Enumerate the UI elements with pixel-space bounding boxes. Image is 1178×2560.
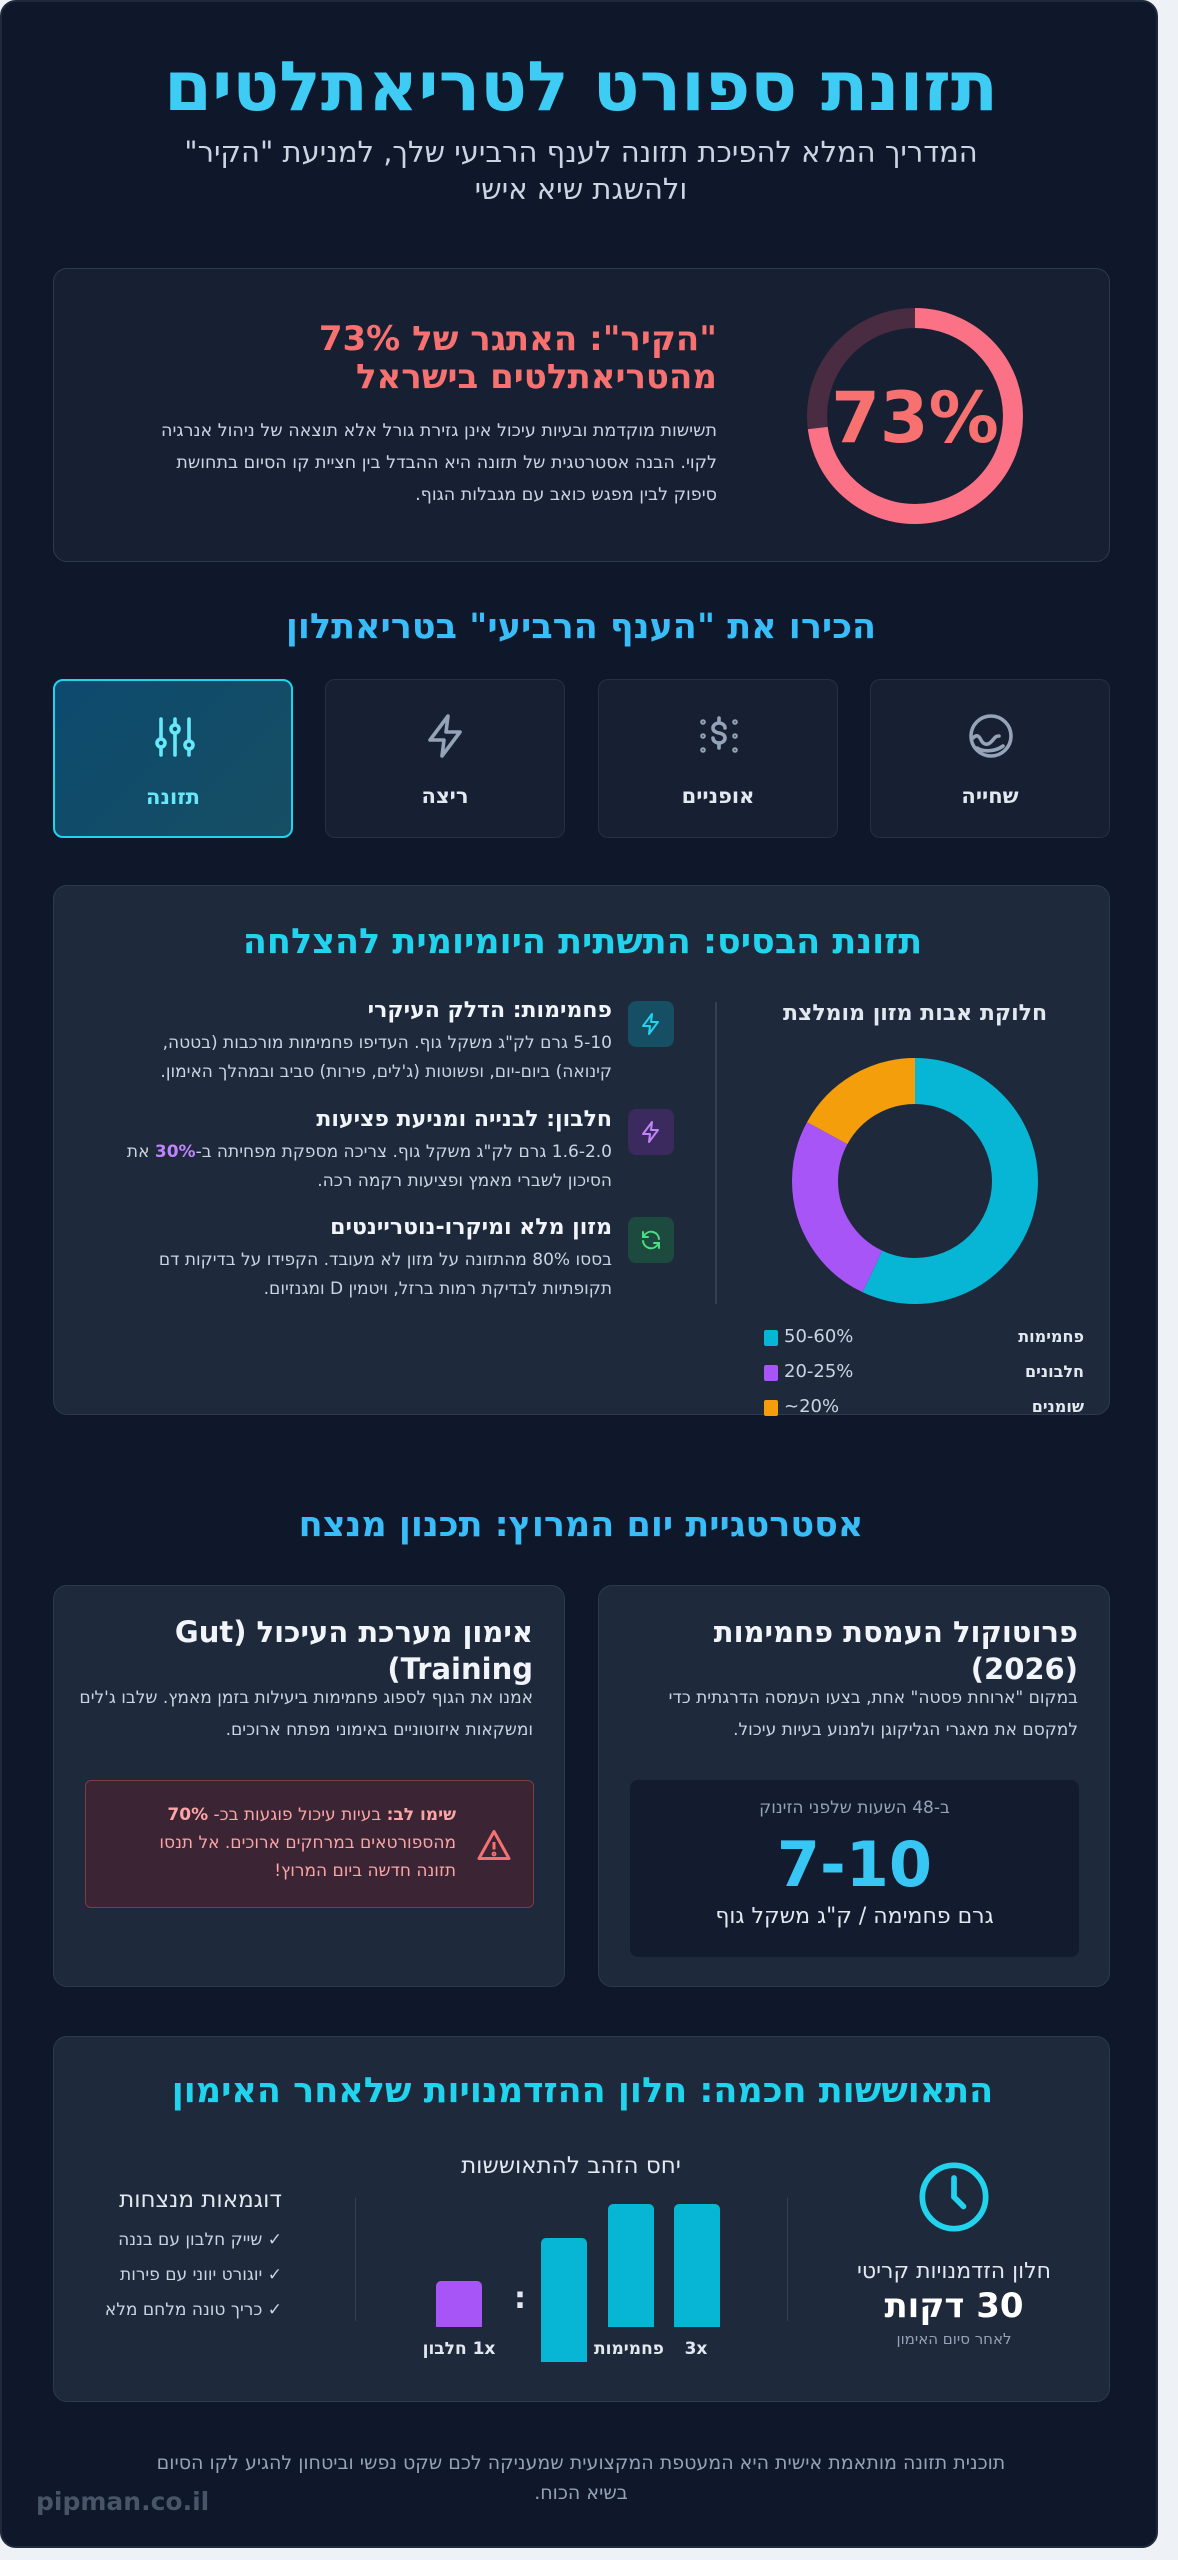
icon: bolt xyxy=(428,714,462,758)
ratio title: יחס הזהב להתאוששות xyxy=(461,2153,681,2179)
window stat: 30 דקות xyxy=(884,2286,1024,2326)
window stat: לאחר סיום האימון xyxy=(896,2330,1012,2348)
heading: race day: אסטרטגיית יום המרוץ: תכנון מנצח xyxy=(299,1505,863,1545)
panel: base nutrition xyxy=(53,885,1110,1415)
panel: gut training xyxy=(53,1585,565,1987)
donut title: חלוקת אבות מזון מומלצת xyxy=(783,1001,1047,1026)
legend: שומנים xyxy=(1032,1397,1084,1416)
ring chart 73%: 73% xyxy=(831,377,999,459)
examples list: ✓ כריך טונה מלחם מלא xyxy=(105,2300,282,2320)
tile: running: ריצה xyxy=(422,784,468,808)
legend: 20-25% xyxy=(784,1361,853,1382)
alert callout xyxy=(85,1780,534,1908)
panel: recovery xyxy=(53,2036,1110,2402)
item: whole food xyxy=(159,1215,612,1299)
tile: swimming xyxy=(870,679,1110,838)
stat heading: מהטריאתלטים בישראל xyxy=(356,357,717,397)
tile: nutrition (active): תזונה xyxy=(146,785,200,809)
item: protein: 1.6-2.0 גרם לק"ג משקל גוף. צריכה מספקת מפחיתה ב-30% את הסיכון לשברי מאמץ ופציעות רקמה רכה. xyxy=(127,1142,612,1191)
examples list: דוגמאות מנצחות xyxy=(119,2187,282,2213)
heading: פרוטוקול העמסת פחמימות (2026) xyxy=(714,1615,1078,1686)
bar chart: ratio: 3x xyxy=(685,2339,707,2359)
item: protein: חלבון: לבנייה ומניעת פציעות xyxy=(316,1107,612,1132)
legend: 50-60% xyxy=(784,1326,853,1347)
icon: protein bolt xyxy=(628,1109,674,1155)
bar chart: ratio: פחמימות xyxy=(594,2339,664,2359)
title: תזונת ספורט לטריאתלטים xyxy=(164,47,998,127)
ring chart 73% xyxy=(807,308,1023,524)
body: במקום "ארוחת פסטה" אחת, בצעו העמסה הדרגתית כדי למקסם את מאגרי הגליקוגן ולמנוע בעיות עיכול. xyxy=(669,1688,1078,1740)
window stat xyxy=(857,2259,1051,2348)
item: carbs xyxy=(160,998,612,1082)
tile: nutrition (active) xyxy=(53,679,293,838)
body: אמנו את הגוף לספוג פחמימות ביעילות בזמן מאמץ. שלבו ג'לים ומשקאות איזוטוניים באימוני מפתח ארוכים. xyxy=(79,1688,533,1740)
tile: cycling: אופניים xyxy=(682,784,754,808)
tile: cycling xyxy=(598,679,838,838)
panel: the wall stat xyxy=(53,268,1110,562)
legend xyxy=(764,1326,1084,1417)
examples list: ✓ שייק חלבון עם בננה xyxy=(118,2230,282,2250)
stat heading xyxy=(319,319,717,397)
item: protein xyxy=(127,1107,612,1191)
item: carbs: פחמימות: הדלק העיקרי xyxy=(368,998,612,1023)
icon: carbs bolt xyxy=(628,1001,674,1047)
heading: fourth branch: הכירו את "הענף הרביעי" בטריאתלון xyxy=(286,607,876,647)
icon: clock xyxy=(920,2162,988,2232)
icon: refresh xyxy=(628,1217,674,1263)
stat box: 7-10 xyxy=(777,1828,932,1901)
icon: sliders xyxy=(155,717,195,757)
item: carbs: 5-10 גרם לק"ג משקל גוף. העדיפו פחמימות מורכבות (בטטה, קינואה) ביום-יום, ופשוטות (ג'לים, פירות) סביב ובמהלך האימון. xyxy=(160,1033,612,1082)
heading: אימון מערכת העיכול (Gut Training) xyxy=(175,1615,533,1686)
heading: תזונת הבסיס: התשתית היומיומית להצלחה xyxy=(243,922,922,962)
icon: swim face xyxy=(969,714,1013,758)
examples list: ✓ יוגורט יווני עם פירות xyxy=(120,2265,282,2285)
donut chart xyxy=(792,1058,1038,1304)
panel: carb loading xyxy=(598,1585,1110,1987)
brand: pipman.co.il xyxy=(36,2487,209,2516)
alert callout: שימו לב: בעיות עיכול פוגעות בכ- 70% מהספורטאים במרחקים ארוכים. אל תנסו תזונה חדשה ביום המרוץ! xyxy=(159,1805,456,1881)
heading: התאוששות חכמה: חלון ההזדמנויות שלאחר האימון xyxy=(172,2071,993,2111)
legend: פחמימות xyxy=(1018,1327,1084,1346)
item: whole food: בססו 80% מהתזונה על מזון לא מעובד. הקפידו על בדיקות דם תקופתיות לבדיקת רמות ברזל, ויטמין D ומגנזיום. xyxy=(159,1250,612,1299)
bar chart: ratio: : xyxy=(514,2281,526,2316)
tile: swimming: שחייה xyxy=(961,784,1019,808)
icon: dollar xyxy=(700,716,738,753)
bar chart: ratio xyxy=(423,2204,720,2362)
stat box: ב-48 השעות שלפני הזינוק xyxy=(759,1798,950,1818)
window stat: חלון הזדמנויות קריטי xyxy=(857,2259,1051,2284)
examples list xyxy=(105,2187,282,2320)
stat body: תשישות מוקדמת ובעיות עיכול אינן גזירת גורל אלא תוצאה של ניהול אנרגיה לקוי. הבנה אסטרטגית של תזונה היא ההבדל בין חציית קו הסיום בתחושת סיפוק לבין מפגש כואב עם מגבלות הגוף. xyxy=(161,421,717,505)
tile: running xyxy=(325,679,565,838)
subtitle: המדריך המלא להפיכת תזונה לענף הרביעי שלך, למניעת "הקיר" ולהשגת שיא אישי xyxy=(184,135,978,206)
footer text: תוכנית תזונה מותאמת אישית היא המעטפת המקצועית שמעניקה לכם שקט נפשי וביטחון להגיע לקו הסיום בשיא הכוח. xyxy=(157,2452,1005,2504)
item: whole food: מזון מלא ומיקרו-נוטריינטים xyxy=(330,1215,612,1240)
stat box: גרם פחמימה / ק"ג משקל גוף xyxy=(715,1904,994,1929)
icon: warning xyxy=(477,1830,510,1860)
legend: חלבונים xyxy=(1025,1362,1084,1381)
legend: ~20% xyxy=(784,1396,839,1417)
bar chart: ratio: 1x חלבון xyxy=(423,2339,495,2359)
stat box xyxy=(630,1780,1079,1957)
stat heading: "הקיר": האתגר של 73% xyxy=(319,319,717,359)
